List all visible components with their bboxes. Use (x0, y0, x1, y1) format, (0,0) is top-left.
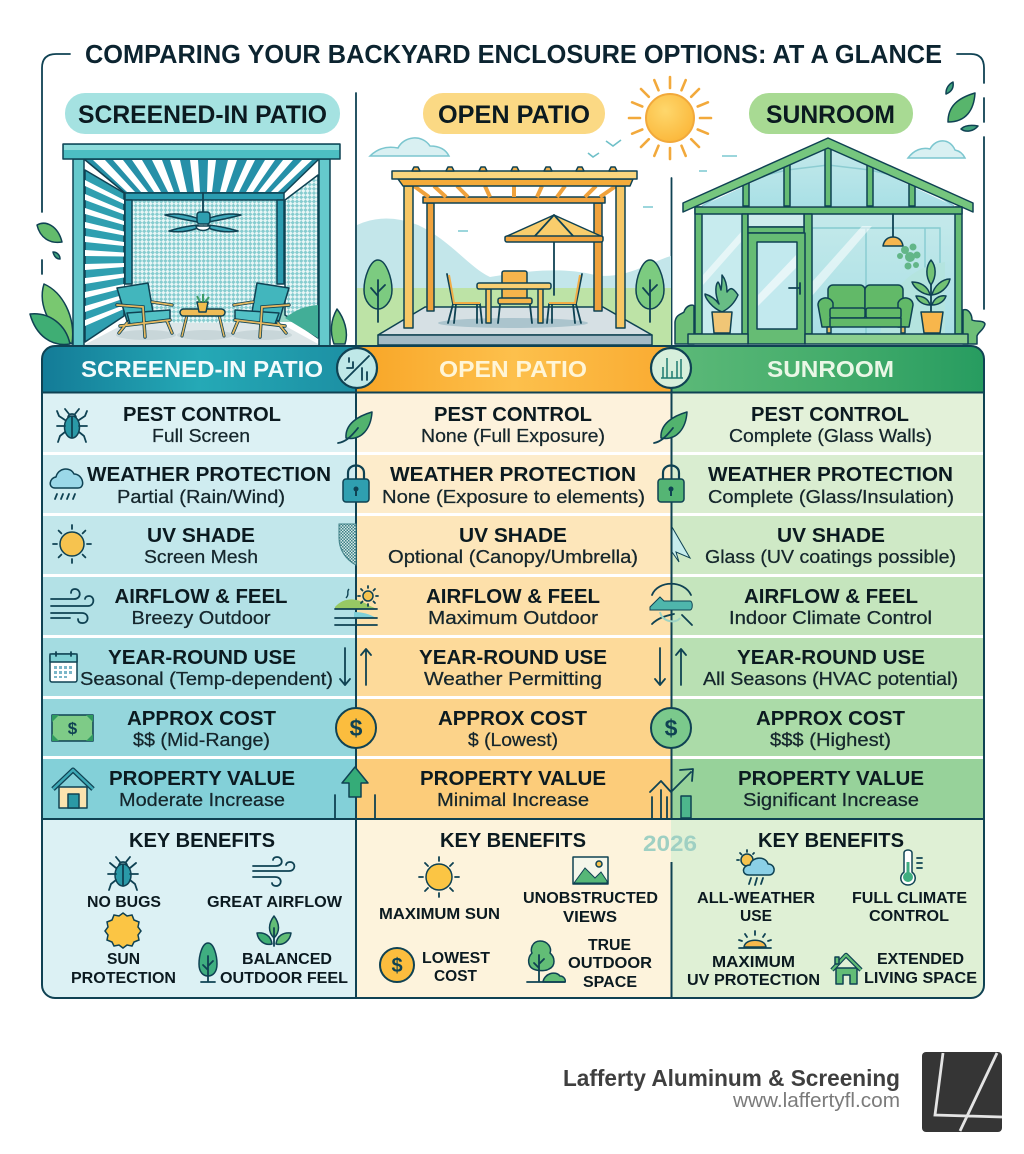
louvered ceiling (84, 159, 319, 193)
row: weather protection (42, 455, 356, 513)
potted plant right (912, 260, 950, 333)
icon: header badge right (651, 348, 691, 388)
key benefits: open patio: MAXIMUM SUN (379, 906, 500, 923)
row: approx cost: $$$ (Highest) (770, 730, 891, 750)
row: property value (356, 759, 671, 818)
column header: sunroom (671, 346, 984, 392)
row: property value: PROPERTY VALUE (420, 768, 606, 790)
icon: calendar (50, 652, 77, 682)
back screen mesh (131, 175, 318, 338)
panel: sunroom illustration (675, 82, 985, 344)
column header: sunroom: SUNROOM (767, 356, 894, 382)
panel: screened-in patio illustration (30, 93, 346, 346)
row: uv shade (42, 516, 356, 574)
seating group (116, 283, 292, 340)
left chair (117, 283, 172, 337)
row: weather protection: Complete (Glass/Insulation) (708, 487, 954, 507)
row: property value: PROPERTY VALUE (738, 768, 924, 790)
icon: mesh shield (339, 524, 356, 565)
icon: sunrise (739, 931, 771, 948)
icon: dollar coin (380, 948, 414, 982)
decorative leaves and cloud (699, 82, 978, 171)
icon: bug (57, 409, 87, 442)
key benefits: open patio: OUTDOOR (568, 955, 652, 972)
base step (688, 334, 968, 344)
column header: open patio (356, 346, 671, 392)
icon: seasonal arrows (340, 648, 371, 685)
key benefits: sunroom: USE (740, 908, 772, 925)
row: weather protection (356, 455, 671, 513)
centre divider icons: first divider (335, 348, 378, 818)
key benefits: sunroom: KEY BENEFITS (758, 830, 904, 852)
icon: tree (199, 943, 217, 982)
column: sunroom (671, 346, 984, 998)
row: pest control: PEST CONTROL (123, 404, 281, 426)
benefit icons: sunroom (737, 850, 922, 984)
column header: open patio: OPEN PATIO (439, 356, 587, 382)
row: pest control: None (Full Exposure) (421, 426, 605, 446)
row: pest control (356, 393, 671, 452)
row: year-round use: YEAR-ROUND USE (419, 647, 607, 669)
icon: climate dome (650, 584, 692, 625)
potted plant left (705, 275, 738, 333)
key benefits: open patio: COST (434, 968, 477, 985)
row: uv shade: UV SHADE (459, 525, 567, 547)
ceiling fan (165, 193, 241, 232)
row: airflow and feel: AIRFLOW & FEEL (426, 586, 600, 608)
icon: sun (53, 525, 91, 563)
2026 watermark (643, 820, 697, 862)
icon: seasonal arrows (655, 648, 686, 685)
key benefits: screened-in patio: BALANCED (242, 951, 332, 968)
icon: sun (629, 77, 711, 159)
row: airflow and feel (671, 577, 984, 635)
row: uv shade: UV SHADE (777, 525, 885, 547)
icon: header badge left (337, 348, 377, 388)
key benefits: sunroom: ALL-WEATHER (697, 890, 815, 907)
icon: bug (108, 857, 138, 890)
row: approx cost (42, 699, 356, 756)
icon: sun (419, 857, 459, 897)
sofa (818, 285, 913, 333)
icon: value arrow (335, 767, 375, 818)
icon: tree and shrub (527, 941, 565, 982)
icon: glass shard (672, 527, 690, 562)
centre divider icons: second divider (650, 348, 693, 818)
side bushes (675, 305, 985, 344)
key benefits: open patio: LOWEST (422, 950, 490, 967)
footer brand (563, 1052, 1002, 1132)
cloud and birds (370, 138, 653, 231)
key benefits: screened-in patio: OUTDOOR FEEL (220, 970, 348, 987)
panel: comparison table (42, 346, 984, 998)
row: property value: Significant Increase (743, 790, 919, 810)
icon: banknote (52, 715, 93, 741)
row: uv shade: Optional (Canopy/Umbrella) (388, 547, 638, 567)
pill heading: sunroom (749, 93, 913, 134)
key benefits: sunroom: MAXIMUM (712, 954, 795, 971)
2026 watermark: 2026 (643, 831, 697, 856)
brand name: Lafferty Aluminum & Screening (563, 1065, 900, 1091)
pendant lamp (883, 214, 903, 246)
row: property value: PROPERTY VALUE (109, 768, 295, 790)
row: pest control (42, 393, 356, 452)
row: weather protection: WEATHER PROTECTION (708, 464, 953, 486)
pill heading: open patio (423, 93, 605, 134)
front posts and roof beam (63, 144, 340, 346)
icon: dollar coin (651, 708, 691, 748)
patio slab (378, 307, 652, 345)
row: airflow and feel: AIRFLOW & FEEL (114, 586, 288, 608)
key benefits: open patio: SPACE (583, 974, 637, 991)
key benefits: sunroom: UV PROTECTION (687, 972, 820, 989)
row: uv shade (356, 516, 671, 574)
key benefits: open patio: KEY BENEFITS (440, 830, 586, 852)
key benefits: sunroom: CONTROL (869, 908, 949, 925)
sunroom walls and glazing (695, 207, 962, 334)
benefit icons: screened-in patio (105, 857, 294, 982)
row: year-round use: Seasonal (Temp-dependent) (80, 669, 333, 689)
door (748, 233, 805, 344)
icon: dollar coin: $ (665, 715, 678, 741)
icon: house (53, 770, 93, 808)
patio floor (84, 322, 320, 345)
row: property value (42, 759, 356, 818)
row: airflow and feel: AIRFLOW & FEEL (744, 586, 918, 608)
row: airflow and feel: Breezy Outdoor (132, 608, 271, 628)
icon: leaf (338, 412, 372, 443)
icon: banknote: $ (68, 719, 78, 738)
row: uv shade: Screen Mesh (144, 547, 258, 567)
icon: dollar coin: $ (391, 955, 403, 977)
row: pest control: Full Screen (152, 426, 250, 446)
column header: screened-in patio: SCREENED-IN PATIO (81, 356, 323, 382)
row: weather protection (671, 455, 984, 513)
icon: rising value chart (650, 769, 693, 818)
table borders (42, 346, 984, 998)
icon: leaf (654, 412, 687, 443)
outer bracket frame (42, 54, 984, 346)
row: approx cost: APPROX COST (438, 708, 587, 730)
key benefits: open patio: VIEWS (563, 909, 617, 926)
logo (922, 1052, 1002, 1132)
icon: sun and waves (335, 586, 378, 625)
row: year-round use (356, 638, 671, 696)
row: airflow and feel: Indoor Climate Control (729, 608, 932, 628)
pergola (392, 167, 637, 328)
row: weather protection: WEATHER PROTECTION (87, 464, 331, 486)
hanging foliage (897, 244, 920, 270)
icon: wind (253, 857, 294, 886)
row: airflow and feel (42, 577, 356, 635)
column: screened-in patio (42, 346, 356, 998)
row: year-round use: Weather Permitting (424, 669, 602, 689)
hills and grass (357, 218, 671, 345)
key benefits: sunroom (671, 820, 984, 998)
umbrella (505, 215, 603, 295)
benefit icons: open patio (380, 857, 608, 982)
icon: house (832, 955, 861, 984)
column: open patio (356, 346, 671, 998)
dining set (447, 271, 582, 323)
row: year-round use: YEAR-ROUND USE (737, 647, 925, 669)
icon: landscape picture (573, 857, 608, 884)
row: approx cost: $ (Lowest) (468, 730, 558, 750)
row: year-round use: YEAR-ROUND USE (108, 647, 296, 669)
key benefits: screened-in patio: KEY BENEFITS (129, 830, 275, 852)
row: approx cost: $$ (Mid-Range) (133, 730, 270, 750)
row: pest control: Complete (Glass Walls) (729, 426, 932, 446)
back frame (125, 193, 284, 284)
key benefits: screened-in patio: SUN (107, 951, 140, 968)
row icons: screened-in patio (50, 409, 93, 808)
row: airflow and feel (356, 577, 671, 635)
row: property value: Moderate Increase (119, 790, 285, 810)
icon: padlock (343, 466, 369, 502)
decorative leaves left (30, 223, 346, 344)
row: uv shade: Glass (UV coatings possible) (705, 547, 956, 567)
key benefits: screened-in patio: NO BUGS (87, 894, 161, 911)
pill heading: open patio: OPEN PATIO (438, 101, 590, 129)
pill heading: screened-in patio: SCREENED-IN PATIO (78, 101, 327, 129)
row: pest control: PEST CONTROL (434, 404, 592, 426)
key benefits: sunroom: EXTENDED (877, 951, 964, 968)
icon: dollar coin (336, 708, 376, 748)
icon: rain cloud (50, 469, 83, 499)
icon: wind (51, 589, 93, 623)
pill heading: sunroom: SUNROOM (766, 101, 895, 129)
row: weather protection: WEATHER PROTECTION (390, 464, 636, 486)
trees (364, 260, 664, 322)
column header: screened-in patio (42, 346, 356, 392)
row: approx cost (356, 699, 671, 756)
row: uv shade: UV SHADE (147, 525, 255, 547)
row: property value: Minimal Increase (437, 790, 589, 810)
row: year-round use (42, 638, 356, 696)
key benefits: open patio: UNOBSTRUCTED (523, 890, 658, 907)
key benefits: sunroom: LIVING SPACE (864, 970, 977, 987)
row: approx cost: APPROX COST (756, 708, 905, 730)
icon: sprout (257, 916, 291, 946)
key benefits: open patio: TRUE (588, 937, 631, 954)
row: approx cost: APPROX COST (127, 708, 276, 730)
key benefits: sunroom: FULL CLIMATE (852, 890, 967, 907)
pill heading: screened-in patio (65, 93, 340, 134)
row: approx cost (671, 699, 984, 756)
key benefits: screened-in patio: GREAT AIRFLOW (207, 894, 343, 911)
row: year-round use (671, 638, 984, 696)
row: pest control: PEST CONTROL (751, 404, 909, 426)
key benefits: screened-in patio (42, 820, 356, 998)
brand url: www.laffertyfl.com (732, 1090, 900, 1112)
icon: padlock (658, 466, 684, 502)
icon: sun badge (105, 913, 141, 948)
icon: dollar coin: $ (350, 715, 363, 741)
panel: open patio illustration (357, 77, 711, 345)
row: airflow and feel: Maximum Outdoor (428, 608, 598, 628)
title: COMPARING YOUR BACKYARD ENCLOSURE OPTIONS: AT A GLANCE (85, 39, 942, 69)
row: property value (671, 759, 984, 818)
row: year-round use: All Seasons (HVAC potential) (703, 669, 958, 689)
icon: thermometer (901, 850, 922, 885)
key benefits: screened-in patio: PROTECTION (71, 970, 176, 987)
row: weather protection: None (Exposure to elements) (382, 487, 645, 507)
row: pest control (671, 393, 984, 452)
row: weather protection: Partial (Rain/Wind) (117, 487, 285, 507)
key benefits: open patio (356, 820, 671, 998)
right chair (233, 283, 289, 337)
louvered left wall (85, 170, 124, 342)
icon: sun behind rain cloud (737, 850, 774, 885)
coffee table with plant (180, 294, 225, 336)
gable glass and roof (683, 138, 973, 212)
row: uv shade (671, 516, 984, 574)
